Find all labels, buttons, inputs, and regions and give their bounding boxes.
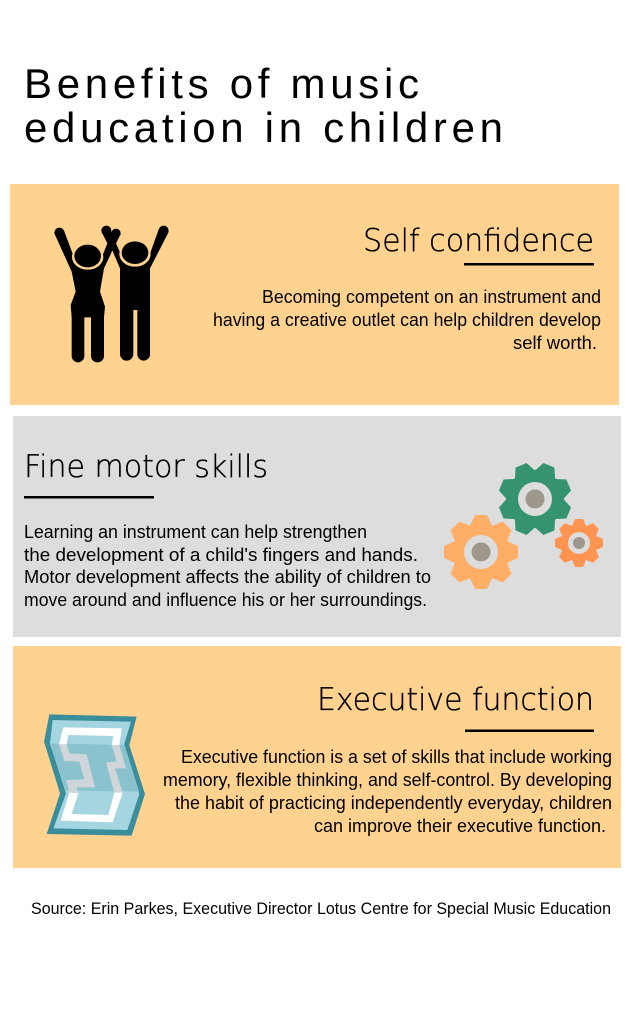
text: fine motor skills body: Motor development affects the ability of children to (24, 567, 431, 587)
text: fine motor skills body: move around and influence his or her surroundings. (24, 590, 427, 610)
text: executive function body: the habit of practicing independently everyday, children (175, 793, 612, 813)
text: executive function body (163, 747, 612, 836)
icon: folded map (44, 714, 145, 836)
icon: gears (444, 451, 603, 589)
text: self confidence body: having a creative outlet can help children develop (213, 310, 601, 330)
text: executive function body: Executive function is a set of skills that include working (181, 747, 612, 767)
text: self confidence body: Becoming competent on an instrument and (262, 287, 601, 307)
heading rule (24, 496, 154, 498)
heading rule (465, 730, 594, 732)
icon: green gear (487, 451, 583, 547)
title (24, 60, 503, 151)
text: fine motor skills body: the development of a child's fingers and hands. (24, 545, 418, 565)
heading rule (464, 263, 594, 266)
title: education in children (24, 104, 503, 151)
text: self confidence body: self worth. (513, 333, 597, 353)
heading: self confidence: Self confidence (363, 223, 594, 259)
text: self confidence body (213, 287, 601, 353)
icon: two people with raised hands (54, 226, 169, 362)
panel: fine motor skills (13, 416, 621, 637)
heading: fine motor skills: Fine motor skills (24, 449, 268, 485)
panel: executive function (13, 646, 621, 868)
icon: light orange gear (444, 515, 518, 589)
text: executive function body: memory, flexible thinking, and self-control. By developing (163, 770, 612, 790)
panel: self confidence (10, 184, 619, 405)
title: Benefits of music (24, 60, 419, 107)
text: fine motor skills body (24, 522, 431, 610)
icon: small orange gear (555, 519, 603, 567)
text: executive function body: can improve their executive function. (314, 816, 606, 836)
heading: executive function: Executive function (317, 682, 594, 718)
source note: Source: Erin Parkes, Executive Director Lotus Centre for Special Music Education (31, 900, 611, 918)
text: fine motor skills body: Learning an instrument can help strengthen (24, 522, 367, 542)
